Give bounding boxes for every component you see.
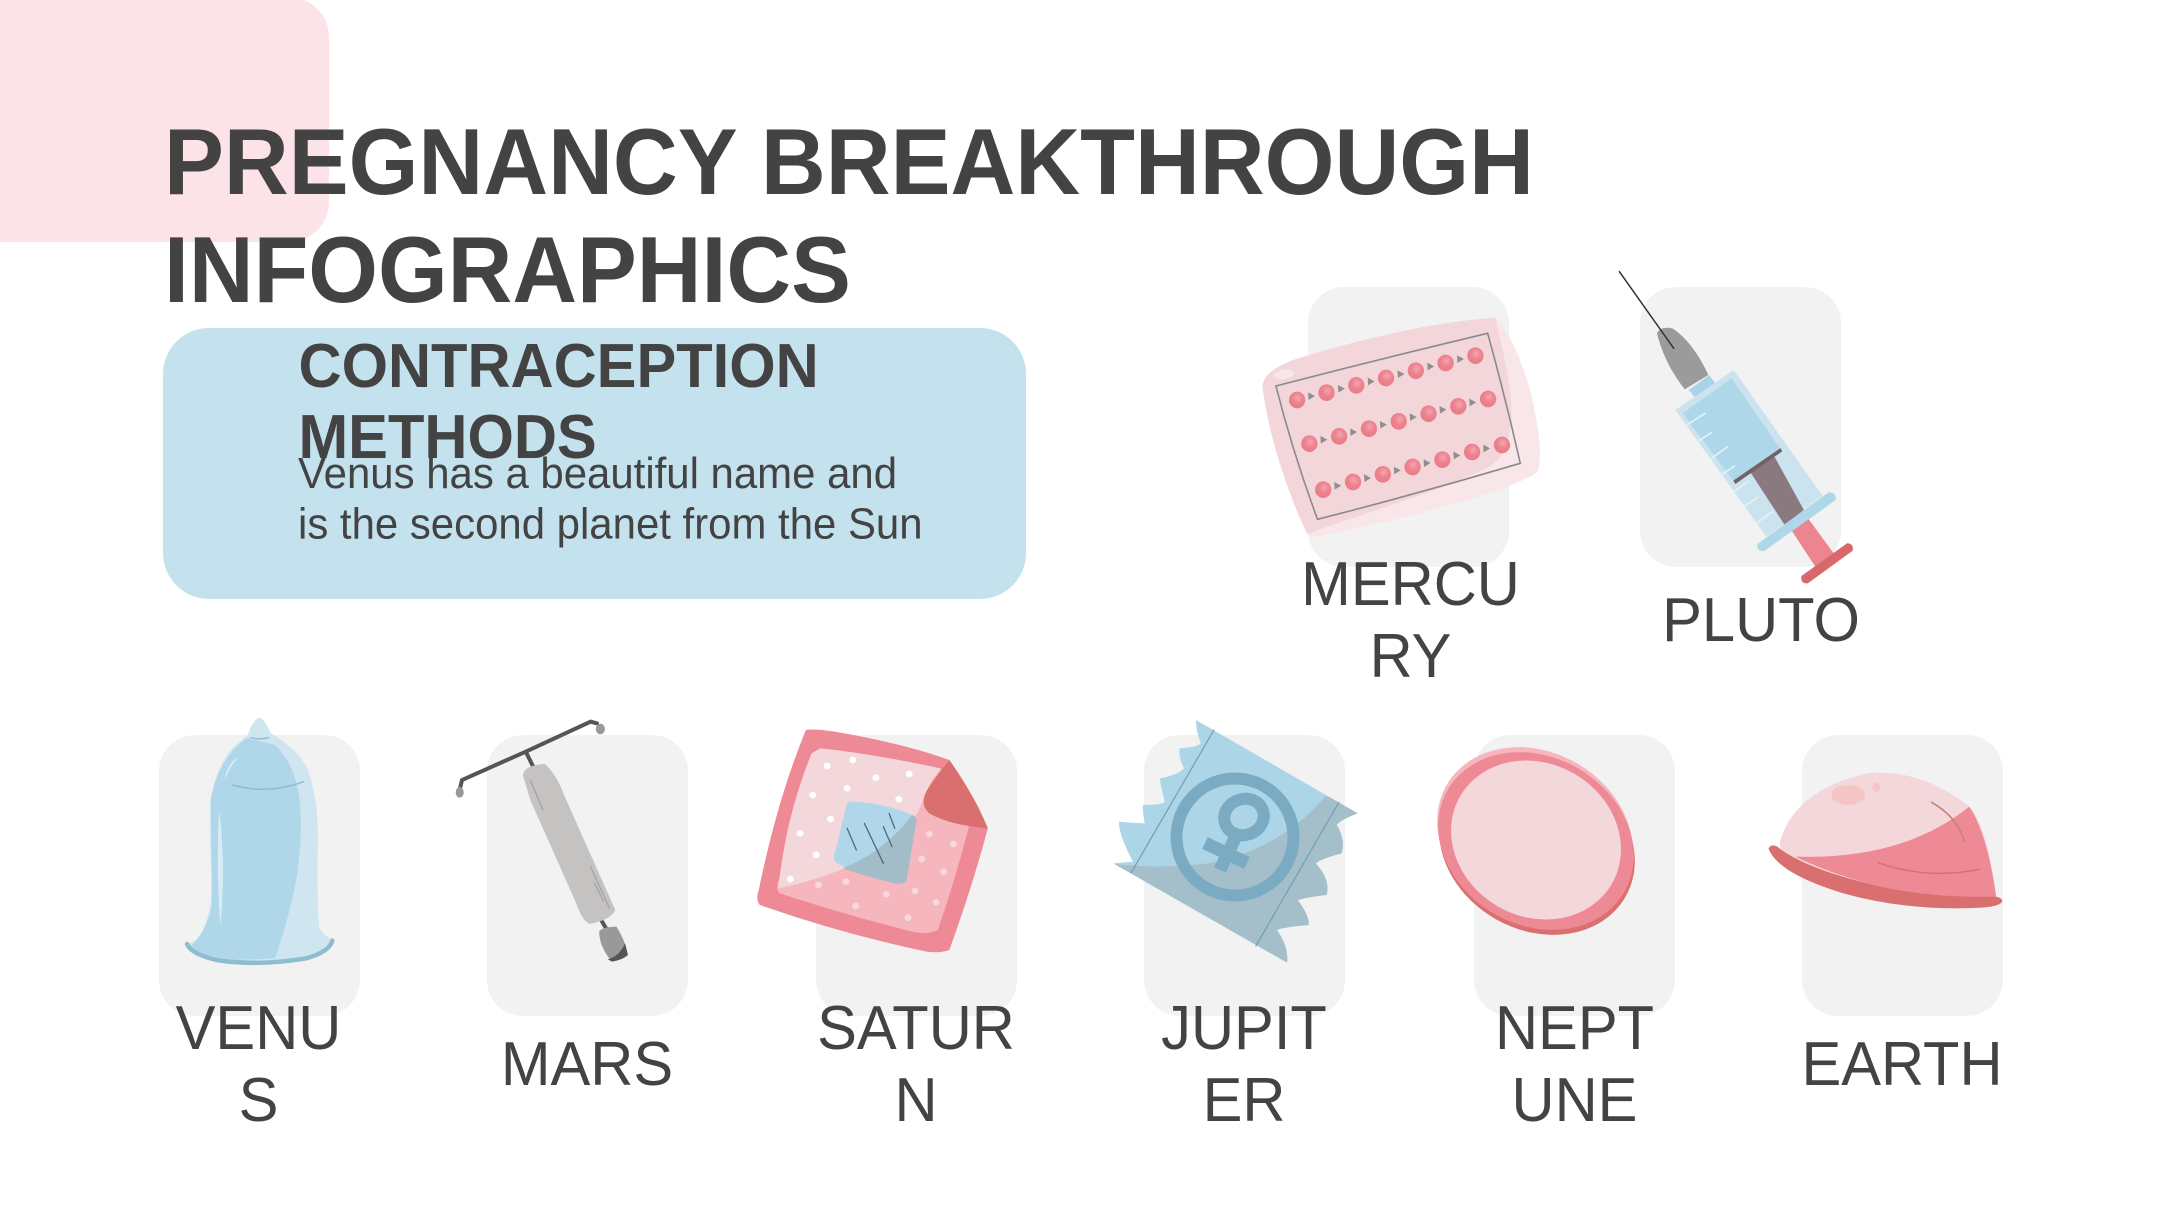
label: jupiter	[1161, 993, 1327, 1134]
decorative pink corner panel	[0, 0, 329, 242]
label: neptune	[1495, 993, 1654, 1134]
card background	[816, 735, 1017, 1016]
panel body text: is the second planet from the Sun	[298, 500, 923, 549]
card background	[1308, 287, 1509, 567]
icon: female symbol packet	[1114, 720, 1358, 962]
card background	[1474, 735, 1675, 1016]
label: neptune: UNE	[1512, 1065, 1637, 1134]
label: mars: MARS	[501, 1029, 673, 1098]
card background	[1640, 287, 1841, 567]
item: mercury pill pack	[1262, 287, 1540, 690]
card background	[159, 735, 360, 1016]
label: saturn: N	[894, 1065, 938, 1134]
item: saturn patch	[757, 729, 1017, 1134]
label: mercury	[1301, 549, 1520, 690]
label: saturn	[817, 993, 1015, 1134]
panel heading: METHODS	[298, 402, 597, 471]
title: PREGNANCY BREAKTHROUGH	[164, 110, 1534, 214]
icon: syringe	[1619, 272, 1853, 583]
icon: IUD	[456, 722, 628, 962]
label: mercury: MERCU	[1301, 549, 1520, 618]
label: neptune: NEPT	[1495, 993, 1654, 1062]
panel: contraception methods	[163, 328, 1026, 599]
panel heading	[298, 331, 819, 471]
label: pluto: PLUTO	[1662, 585, 1860, 654]
panel body text	[298, 449, 923, 549]
icon: condom	[185, 717, 333, 963]
label: earth: EARTH	[1801, 1029, 2003, 1098]
label: venus	[176, 993, 341, 1134]
icon: birth control pill pack	[1262, 318, 1540, 537]
card background	[1802, 735, 2003, 1016]
label: jupiter: ER	[1203, 1065, 1285, 1134]
label: venus: VENU	[176, 993, 341, 1062]
item: mars IUD	[456, 722, 688, 1098]
label: venus: S	[239, 1065, 278, 1134]
title	[164, 110, 1534, 322]
item: venus condom	[159, 717, 360, 1134]
panel heading: CONTRACEPTION	[298, 331, 819, 400]
icon: contraceptive patch	[757, 729, 988, 952]
item: neptune vaginal ring	[1405, 712, 1675, 1134]
card background	[487, 735, 688, 1016]
icon: cervical cap	[1768, 773, 2002, 908]
title: INFOGRAPHICS	[164, 218, 851, 322]
item: earth cervical cap	[1768, 735, 2003, 1098]
label: saturn: SATUR	[817, 993, 1015, 1062]
card background	[1144, 735, 1345, 1016]
item: jupiter female condom pack	[1114, 720, 1358, 1121]
label: mercury: RY	[1370, 621, 1451, 690]
icon: vaginal ring	[1405, 712, 1667, 970]
panel body text: Venus has a beautiful name and	[298, 449, 897, 498]
item: pluto syringe	[1619, 272, 1860, 654]
label: jupiter: JUPIT	[1161, 993, 1327, 1062]
